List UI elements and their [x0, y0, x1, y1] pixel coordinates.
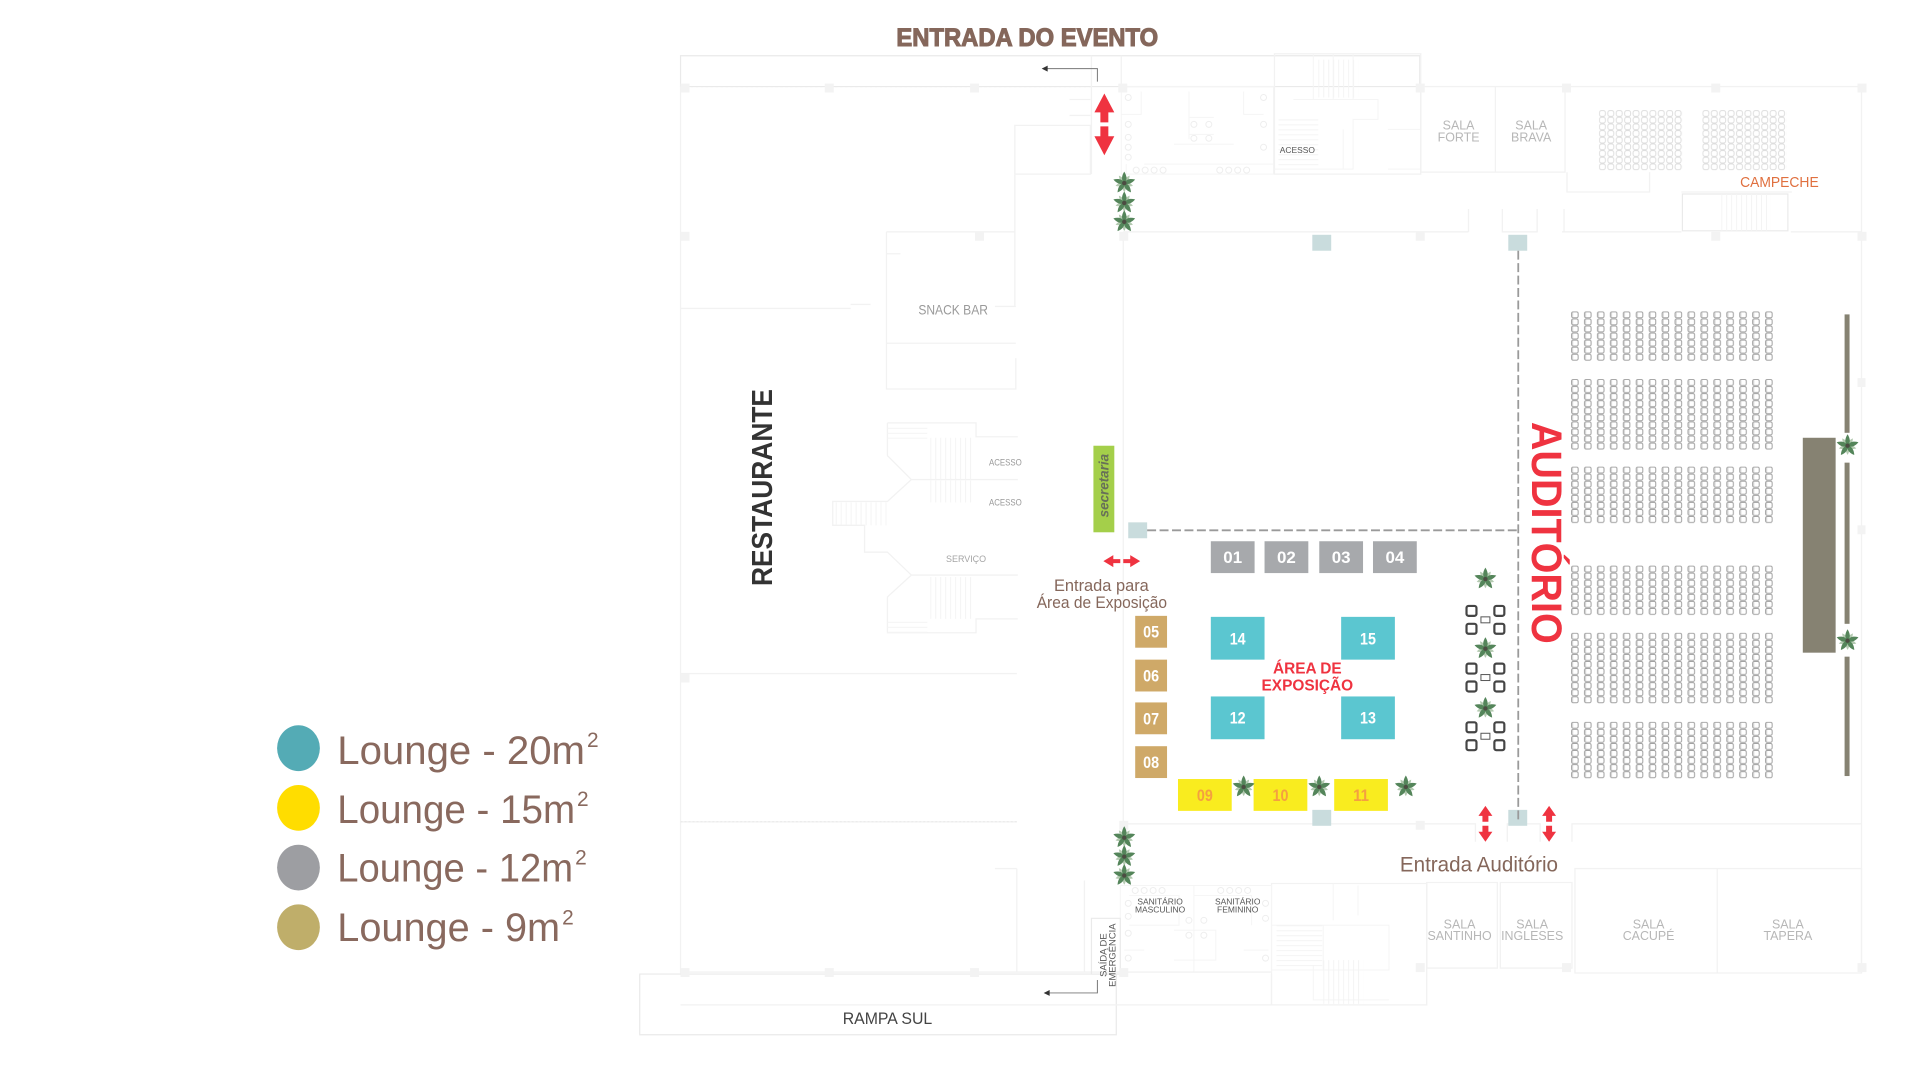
label: sala tapera: SALA	[1772, 917, 1804, 931]
lounge 15m2: booths 09 to 11	[1178, 779, 1388, 811]
lounge 20m2: booths 12 to 15: 12	[1230, 708, 1246, 727]
top stair block	[1274, 54, 1421, 174]
lounge 15m2: booths 09 to 11: 09	[1197, 786, 1213, 805]
label: acesso 2: ACESSO	[989, 497, 1022, 507]
lounge 12m2: booths 01 to 04: 01	[1223, 548, 1242, 567]
title: entrada do evento: ENTRADA DO EVENTO	[896, 24, 1158, 52]
label: sala tapera: TAPERA	[1763, 929, 1813, 943]
label: saida de emergencia	[1098, 923, 1118, 987]
arrow: expo entrance horizontal	[1103, 555, 1140, 567]
pillar squares	[1128, 235, 1527, 826]
label: auditorio: AUDITÓRIO	[1522, 422, 1571, 644]
panel: secretaria: secretaria	[1096, 453, 1111, 517]
label: entrada auditorio: Entrada Auditório	[1400, 854, 1558, 877]
label: sala santinho: SANTINHO	[1427, 929, 1492, 943]
label: restaurante: RESTAURANTE	[747, 389, 779, 586]
small room seats right	[1702, 110, 1786, 170]
lounge 12m2: booths 01 to 04	[1211, 541, 1417, 573]
small room seats left	[1599, 110, 1683, 170]
label: sala ingleses: INGLESES	[1501, 929, 1563, 943]
label: campeche: CAMPECHE	[1740, 175, 1819, 191]
lounge 9m2: booths 05 to 08: 08	[1143, 753, 1159, 772]
label: acesso top: ACESSO	[1280, 145, 1315, 155]
label: sala ingleses: SALA	[1516, 917, 1549, 931]
label: acesso 1: ACESSO	[989, 458, 1022, 468]
legend item: 9m2: 2	[562, 906, 574, 929]
label: area de exposicao: ÁREA DE	[1273, 661, 1342, 678]
floor plan base	[640, 54, 1866, 1035]
label: entrada para area de exposicao	[1037, 577, 1167, 612]
label: saida de emergencia: SAÍDA DE	[1098, 933, 1109, 977]
upper rooms	[1421, 87, 1861, 172]
top entrance band	[681, 56, 1420, 87]
label: sala santinho: SALA	[1444, 917, 1476, 931]
legend item: 15m2: Lounge - 15m	[337, 788, 575, 832]
label: sala brava: SALA	[1515, 118, 1548, 132]
label: sanitario feminino: SANITÁRIO	[1215, 896, 1261, 906]
dashed partition lines	[1147, 251, 1518, 822]
top toilets block	[1121, 87, 1273, 174]
auditorium seats: block 1	[1571, 311, 1773, 361]
lounge 20m2: booths 12 to 15	[1211, 617, 1395, 739]
label: sala cacupe: SALA	[1633, 917, 1665, 931]
label: rampa sul: RAMPA SUL	[843, 1010, 932, 1028]
legend item: 12m2: Lounge - 12m	[337, 847, 573, 891]
label: area de exposicao: EXPOSIÇÃO	[1262, 676, 1353, 694]
plants: between yellow booths	[1232, 776, 1417, 798]
lounge 9m2: booths 05 to 08: 07	[1143, 709, 1159, 728]
lounge 12m2: booths 01 to 04: 03	[1332, 548, 1351, 567]
auditorium seats: block 6	[1571, 722, 1773, 778]
label: sala brava: BRAVA	[1511, 130, 1552, 144]
plants: lower corridor	[1113, 826, 1136, 886]
label: entrada para area de exposicao: Área de Exposição	[1037, 593, 1167, 612]
lower corridor and rooms	[1120, 824, 1861, 842]
label: sala forte: SALA	[1443, 118, 1475, 132]
arrow: thin top direction	[1042, 66, 1097, 82]
stage	[1803, 438, 1836, 653]
auditorium seats: block 2	[1571, 379, 1773, 450]
arrow: main entrance red	[1094, 94, 1114, 155]
stage back wall	[1845, 314, 1850, 776]
label: sanitario feminino: FEMININO	[1217, 904, 1259, 914]
lounge 15m2: booths 09 to 11: 10	[1273, 786, 1288, 805]
arrows: auditorium entrances	[1478, 806, 1556, 842]
lounge 9m2: booths 05 to 08	[1135, 616, 1167, 778]
lounge 20m2: booths 12 to 15: 15	[1360, 630, 1376, 649]
label: sanitario masculino: SANITÁRIO	[1137, 896, 1183, 906]
lounge 20m2: booths 12 to 15: 14	[1230, 630, 1246, 649]
auditorium seats: block 5	[1571, 633, 1773, 703]
lounge 9m2: booths 05 to 08: 05	[1143, 623, 1159, 642]
lounge 15m2: booths 09 to 11: 11	[1353, 786, 1369, 805]
label: saida de emergencia: EMERGÊNCIA	[1107, 923, 1118, 987]
lounge 9m2: booths 05 to 08: 06	[1143, 667, 1159, 686]
bottom ramp	[640, 974, 1116, 1035]
lounge 12m2: booths 01 to 04: 04	[1385, 548, 1405, 567]
restaurant stairs	[833, 423, 1018, 633]
panel: secretaria	[1093, 446, 1114, 532]
legend	[277, 725, 599, 950]
label: sala cacupe: CACUPÉ	[1623, 928, 1674, 943]
plants: top corridor	[1113, 172, 1136, 232]
auditorium seats: block 3	[1571, 467, 1773, 523]
legend item: 20m2: 2	[587, 729, 599, 752]
label: sala forte: FORTE	[1438, 130, 1479, 144]
plants: stage	[1836, 434, 1859, 651]
legend item: 9m2: Lounge - 9m	[337, 906, 560, 950]
legend item: 12m2: 2	[575, 847, 587, 870]
plants: side column	[1474, 568, 1497, 719]
legend item: 20m2: Lounge - 20m	[337, 729, 585, 773]
label: entrada para area de exposicao: Entrada para	[1054, 577, 1150, 595]
label: sanitario masculino: MASCULINO	[1135, 904, 1186, 914]
lower toilets block	[1120, 885, 1272, 972]
legend item: 15m2: 2	[577, 788, 589, 811]
lounge 12m2: booths 01 to 04: 02	[1277, 548, 1296, 567]
auditorium seats: block 4	[1571, 566, 1773, 615]
lounge 20m2: booths 12 to 15: 13	[1360, 708, 1376, 727]
arrow: thin bottom direction	[1044, 980, 1097, 996]
label: servico: SERVIÇO	[946, 554, 986, 564]
lounge seating clusters	[1467, 606, 1504, 750]
label: snack bar: SNACK BAR	[918, 302, 988, 317]
